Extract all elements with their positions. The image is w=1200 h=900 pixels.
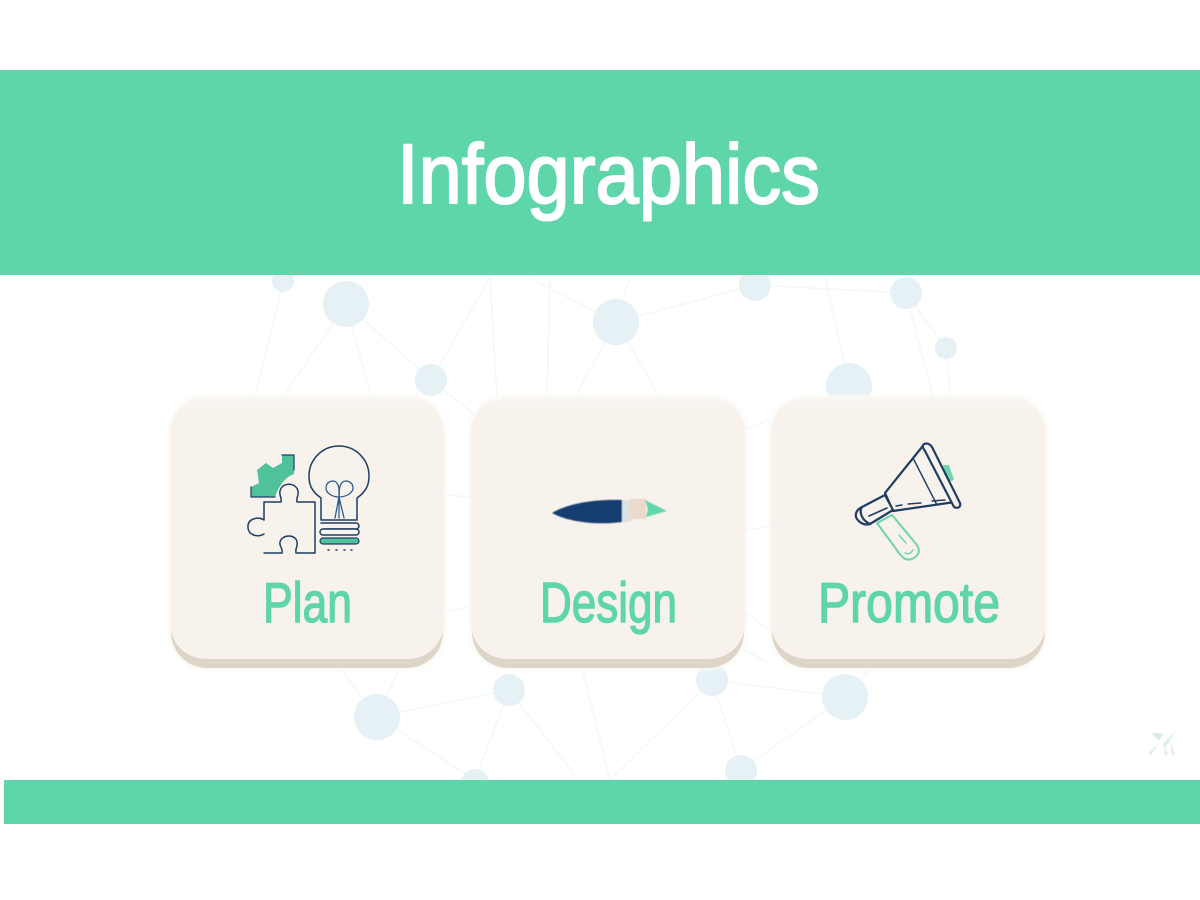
- panel: plan: [168, 395, 446, 670]
- watermark logo: [1149, 731, 1176, 756]
- label design: Design: [540, 571, 677, 635]
- card promote: [769, 395, 1048, 670]
- icon: gear, puzzle and light bulb: [248, 446, 369, 553]
- label plan: Plan: [263, 571, 352, 635]
- icon: megaphone: [856, 444, 960, 560]
- card plan: [168, 395, 446, 670]
- panel: design: [469, 395, 747, 670]
- label promote: Promote: [818, 571, 1000, 635]
- background network pattern: [255, 269, 957, 797]
- card design: [469, 395, 747, 670]
- icon: paint brush: [552, 499, 667, 523]
- panel: promote: [769, 395, 1048, 670]
- title: Infographics: [397, 127, 820, 221]
- header band: [0, 70, 1200, 275]
- footer band: [4, 780, 1200, 824]
